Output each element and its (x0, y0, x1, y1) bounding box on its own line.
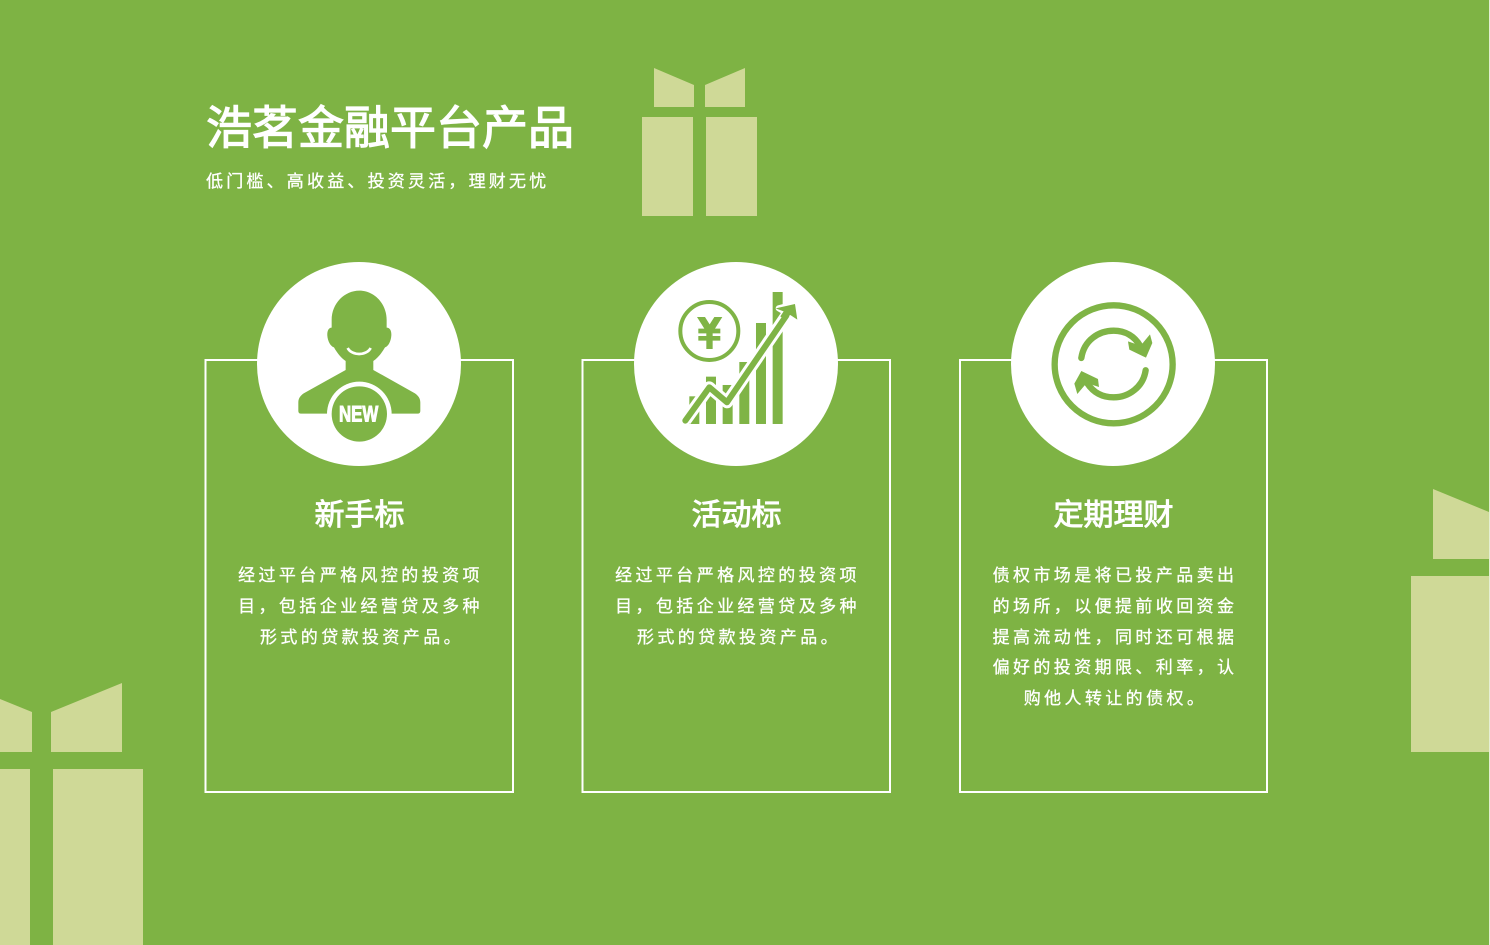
text block: 债权市场是将已投产品卖出 (993, 566, 1237, 585)
icon: circular refresh arrows (1055, 305, 1173, 423)
text block: 购他人转让的债权。 (1024, 689, 1207, 708)
text block: 的场所，以便提前收回资金 (993, 597, 1237, 616)
heading: 新手标 (314, 499, 404, 532)
text block (993, 566, 1237, 708)
icon: gift box bottom left (0, 683, 143, 945)
icon: gift box top (642, 68, 757, 216)
icon: person with new badge (298, 291, 420, 446)
text block: 偏好的投资期限、利率，认 (993, 658, 1237, 677)
heading: 活动标 (692, 499, 782, 532)
panel: 活动标 (582, 262, 890, 792)
panel: 新手标 (206, 262, 513, 792)
text block: 经过平台严格风控的投资项 (238, 566, 483, 585)
text block: 目，包括企业经营贷及多种 (615, 597, 860, 616)
title: 浩茗金融平台产品 (206, 102, 574, 154)
text block: 目，包括企业经营贷及多种 (238, 597, 483, 616)
icon: yen coin and rising chart (680, 292, 797, 424)
icon: person with new badge: NEW (339, 402, 379, 427)
subtitle: 低门槛、高收益、投资灵活，理财无忧 (206, 172, 549, 191)
text block (238, 566, 483, 647)
heading: 定期理财 (1054, 499, 1174, 532)
icon: gift box right edge (1411, 489, 1489, 752)
text block: 提高流动性，同时还可根据 (993, 628, 1237, 647)
text block: 经过平台严格风控的投资项 (615, 566, 860, 585)
text block (615, 566, 860, 647)
text block: 形式的贷款投资产品。 (637, 628, 841, 647)
text block: 形式的贷款投资产品。 (260, 628, 464, 647)
panel: 定期理财 (960, 262, 1267, 792)
